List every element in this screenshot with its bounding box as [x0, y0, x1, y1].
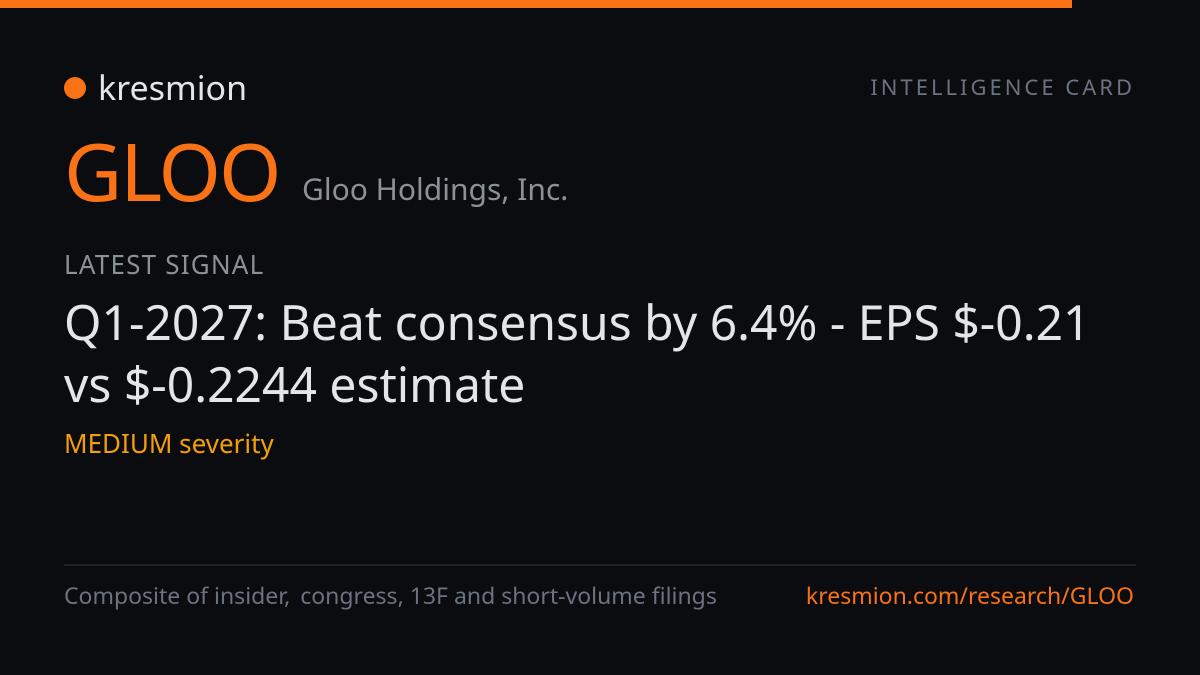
signal headline: vs $-0.2244 estimate [64, 352, 525, 417]
ticker: GLOO [64, 116, 280, 225]
signal headline: Q1-2027: Beat consensus by 6.4% - EPS $-0.21 [64, 290, 1090, 355]
company name: Gloo Holdings, Inc. [302, 168, 568, 209]
footer note: Composite of insider, congress, 13F and short-volume filings [64, 579, 717, 611]
footer divider [64, 564, 1136, 566]
footer link: kresmion.com/research/GLOO [806, 579, 1134, 611]
signal headline [64, 290, 1090, 417]
brand name: kresmion [98, 64, 247, 110]
card type label: INTELLIGENCE CARD [870, 72, 1135, 102]
severity: MEDIUM severity [64, 425, 274, 461]
section label: LATEST SIGNAL [64, 246, 264, 282]
brand dot [64, 77, 86, 99]
top accent bar [0, 0, 1072, 8]
